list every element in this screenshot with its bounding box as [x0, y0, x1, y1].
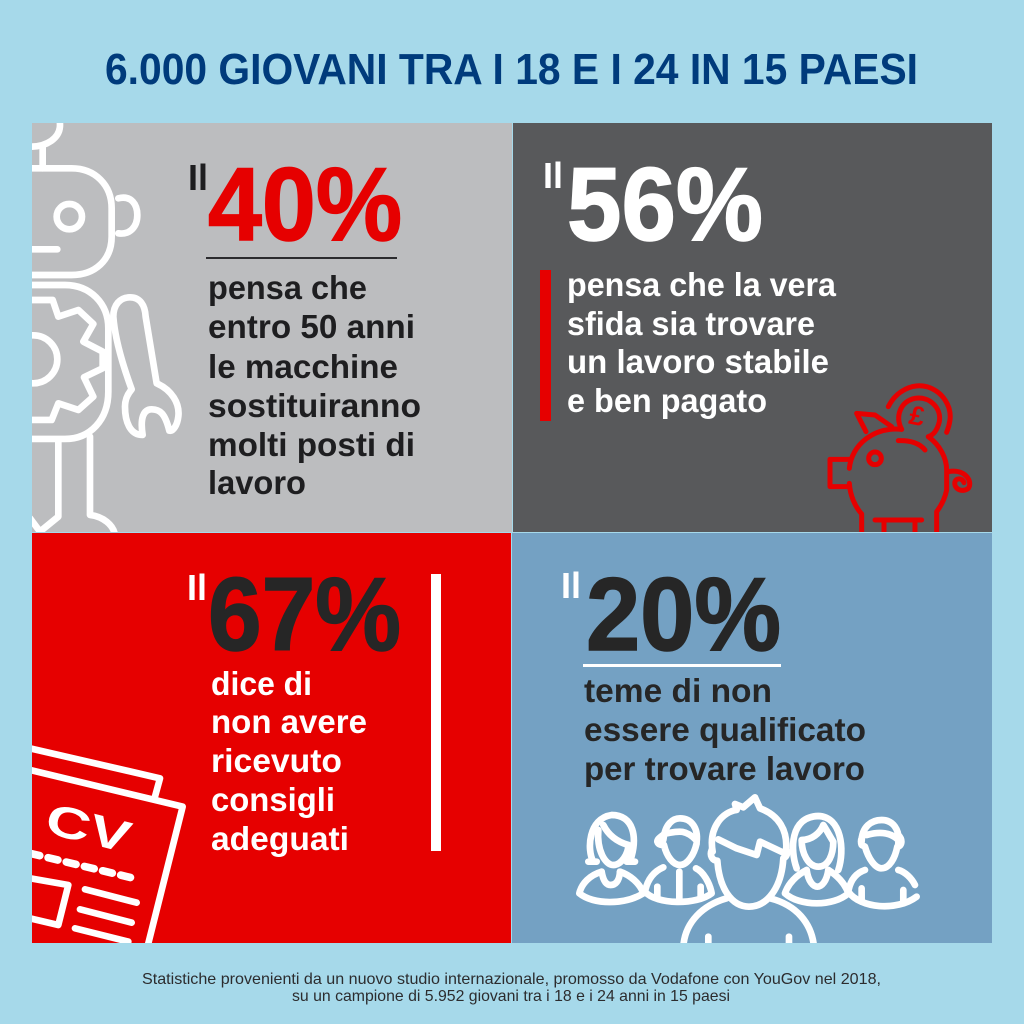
text: 67% description: adeguati — [211, 820, 349, 857]
text: 40% description: le macchine — [208, 348, 398, 385]
text: 56% description — [567, 266, 837, 419]
title: 6.000 GIOVANI TRA I 18 E I 24 IN 15 PAESI — [105, 45, 918, 94]
text: 56% description: e ben pagato — [567, 382, 767, 419]
text: 20% description: per trovare lavoro — [584, 750, 865, 787]
footer: source note — [142, 971, 881, 1005]
accent bar: red — [540, 270, 551, 421]
footer: source note: su un campione di 5.952 giovani tra i 18 e i 24 anni in 15 paesi — [292, 988, 730, 1005]
stat: Il 67%: Il — [187, 567, 207, 608]
icon: group of young people — [579, 797, 917, 947]
divider: 40% — [206, 257, 397, 259]
text: 56% description: pensa che la vera — [567, 266, 837, 303]
stat: Il 40%: Il — [188, 157, 208, 198]
footer: source note: Statistiche provenienti da un nuovo studio internazionale, promosso da Vodafone con YouGov nel 2018, — [142, 971, 881, 988]
stat: Il 56%: 56% — [567, 147, 763, 263]
icon: robot — [32, 123, 182, 532]
text: 20% description: teme di non — [584, 672, 772, 709]
accent bar: white — [431, 574, 441, 851]
icon: CV document — [30, 748, 183, 950]
text: 20% description: essere qualificato — [584, 711, 866, 748]
panel: 67% advice — [30, 533, 511, 950]
text: 20% description — [584, 672, 866, 787]
text: 67% description: consigli — [211, 781, 335, 818]
text: 56% description: un lavoro stabile — [567, 343, 829, 380]
text: 40% description: sostituiranno — [208, 387, 421, 424]
text: 67% description: non avere — [211, 703, 367, 740]
text: 40% description: entro 50 anni — [208, 308, 415, 345]
icon: CV document: CV — [41, 794, 137, 863]
panel: 40% machines — [9, 112, 512, 535]
text: 67% description: ricevuto — [211, 742, 342, 779]
icon: piggy bank — [830, 386, 970, 537]
text: 40% description — [208, 269, 421, 501]
text: 40% description: molti posti di — [208, 426, 415, 463]
panel: 20% qualification — [512, 533, 992, 947]
text: 56% description: sfida sia trovare — [567, 305, 815, 342]
text: 67% description: dice di — [211, 665, 312, 702]
stat: Il 20%: Il — [561, 565, 581, 606]
text: 67% description — [211, 665, 367, 857]
stat: Il 56%: Il — [543, 155, 563, 196]
icon: piggy bank: £ — [907, 400, 927, 432]
stat: Il 20%: 20% — [586, 557, 781, 673]
divider: 20% — [583, 664, 781, 667]
text: 40% description: pensa che — [208, 269, 367, 306]
text: 40% description: lavoro — [208, 464, 306, 501]
stat: Il 40%: 40% — [208, 147, 402, 263]
stat: Il 67%: 67% — [208, 557, 401, 673]
panel: 56% stable job — [513, 123, 992, 537]
